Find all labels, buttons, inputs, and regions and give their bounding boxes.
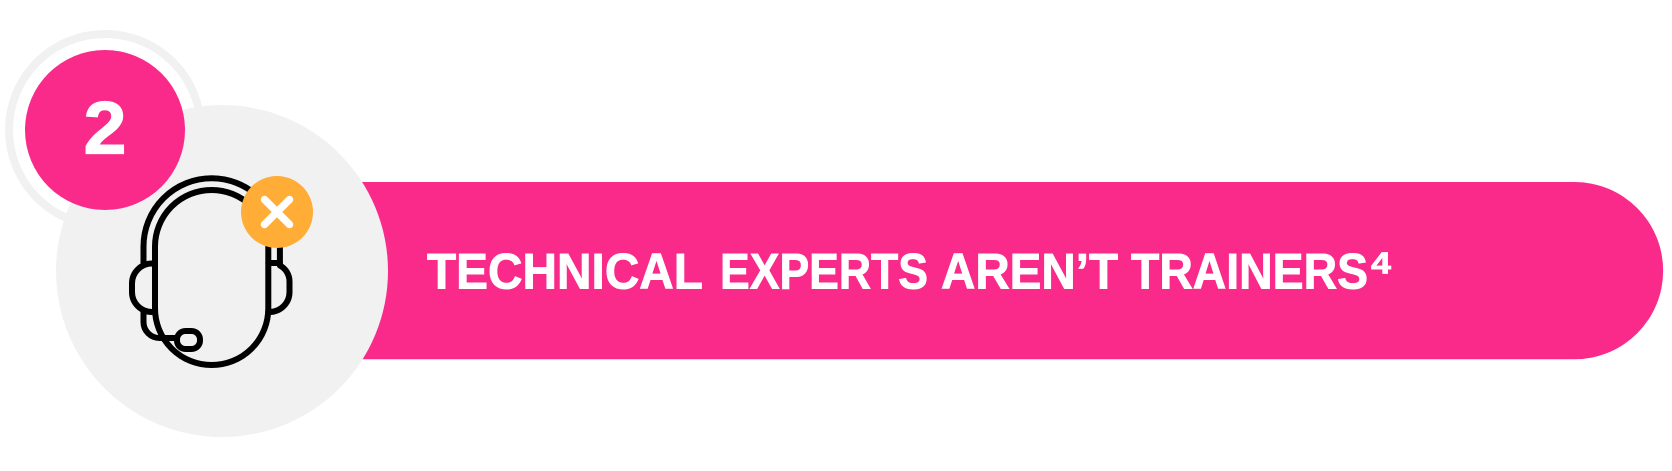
- icon backdrop circle: [56, 105, 388, 437]
- title: AREN’T: [941, 243, 1118, 300]
- banner bar: [300, 182, 1663, 359]
- title: [427, 243, 1392, 300]
- title: TRAINERS: [1131, 243, 1368, 300]
- number badge: 2: [84, 86, 126, 170]
- icon: headset on head: [132, 178, 290, 365]
- number ring: [9, 34, 201, 226]
- title: 4: [1371, 246, 1392, 280]
- icon: orange cross badge: [241, 176, 313, 248]
- title: TECHNICAL: [427, 243, 703, 300]
- title: EXPERTS: [720, 243, 928, 300]
- number badge: [25, 50, 185, 210]
